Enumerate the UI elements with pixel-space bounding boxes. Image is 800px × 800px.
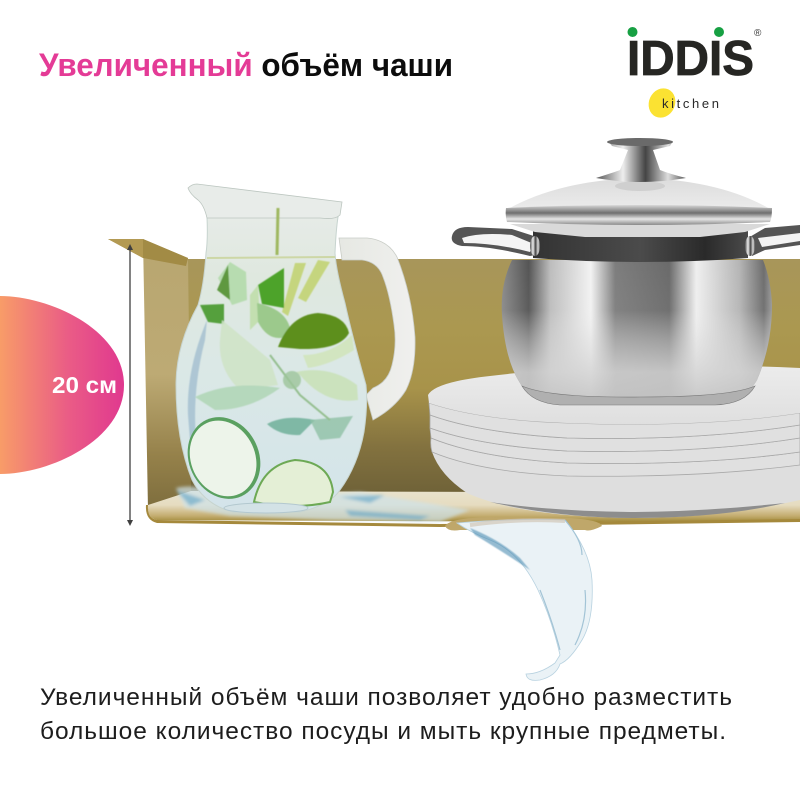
lime half	[278, 313, 349, 349]
pot lower sheen	[502, 260, 772, 404]
logo: IDDIS kitchen: IDDIS	[627, 32, 754, 86]
handle rivets	[530, 236, 540, 256]
pot collar band	[533, 231, 748, 262]
water line	[207, 257, 335, 258]
left wall	[143, 239, 191, 510]
pitcher contents	[188, 208, 358, 440]
water falling from drain	[457, 519, 592, 680]
description text: Увеличенный объём чаши позволяет удобно разместить	[40, 684, 732, 711]
logo: IDDIS kitchen	[627, 27, 762, 122]
left pot handle	[452, 227, 540, 256]
pitcher body	[176, 217, 367, 512]
bottom edge	[146, 505, 800, 527]
lime sticks	[282, 260, 330, 316]
back wall	[188, 259, 800, 494]
pitcher base	[224, 503, 308, 513]
description text	[40, 684, 732, 745]
logo: IDDIS kitchen: ®	[754, 28, 762, 39]
title: Увеличенный объём чаши	[39, 47, 453, 83]
top plate	[428, 365, 800, 424]
bottom bowl plate	[432, 452, 800, 518]
stacked plate rims	[431, 438, 800, 476]
top lip	[108, 239, 188, 266]
water on sink floor	[176, 486, 470, 522]
drain	[445, 517, 602, 530]
pot base	[522, 386, 755, 405]
lid dome	[508, 178, 770, 209]
height arrow	[127, 244, 133, 526]
lime slice small	[254, 460, 333, 506]
sink bowl	[108, 239, 800, 530]
depth badge	[0, 296, 124, 474]
pitcher neck and spout	[188, 184, 342, 219]
mint stem	[277, 208, 278, 255]
pitcher with water, mint and lime	[175, 184, 415, 513]
pale leaves	[220, 320, 278, 390]
dark leaves	[218, 262, 247, 305]
plate stack	[428, 365, 800, 518]
lime slice large	[175, 405, 273, 511]
logo: IDDIS kitchen: kitchen	[662, 96, 719, 111]
depth label: 20 см	[52, 372, 117, 398]
lid rim	[506, 205, 772, 225]
pot body	[502, 260, 772, 404]
floor	[148, 491, 800, 522]
description text: большое количество посуды и мыть крупные предметы.	[40, 718, 726, 745]
right pot handle	[748, 225, 800, 256]
left blue refraction	[188, 320, 207, 440]
pitcher handle	[339, 238, 415, 420]
mint leaf	[257, 303, 291, 338]
lid knob	[596, 138, 686, 191]
cooking pot with glass lid	[452, 138, 800, 405]
